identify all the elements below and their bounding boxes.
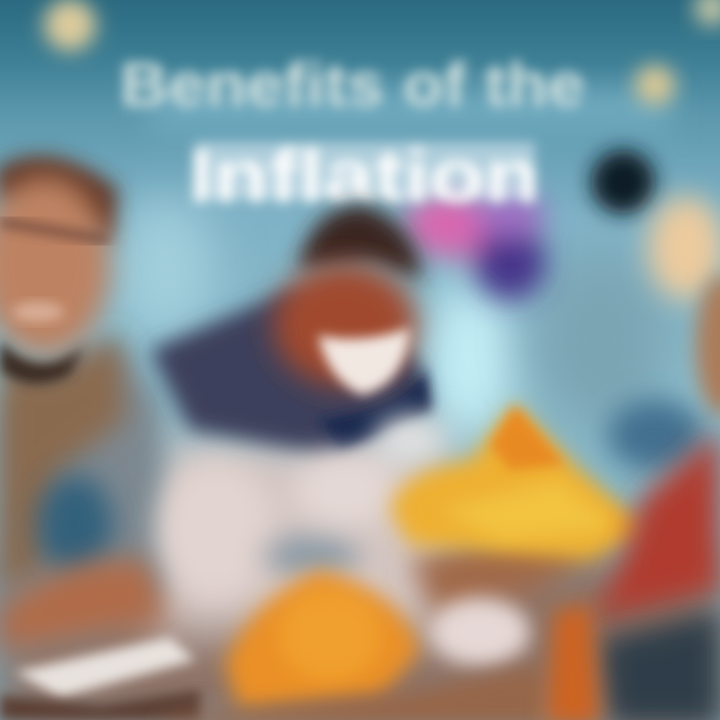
hair [298,205,422,280]
beard [0,340,85,384]
person: center figure [150,205,430,455]
title line 1: Benefits of the [120,51,585,120]
white bowl [430,598,530,666]
brown basket under yellow food [410,530,610,620]
glasses [0,222,108,240]
warm lower scene base [0,440,720,720]
background lights [44,0,720,105]
white table items [157,415,445,600]
dark chair [600,610,720,720]
orange food pile [225,570,420,710]
sweater [0,340,170,650]
yellow food pile [390,405,650,560]
pink and purple balloon [405,193,546,300]
collar [320,370,430,450]
face [696,275,720,415]
hair [0,156,118,240]
title line 2: Inflation [188,134,540,219]
white mask [318,328,410,395]
person: right child [545,275,720,720]
smile [12,302,64,322]
red sweater [590,430,720,620]
person: left man [0,156,200,720]
dark round object [591,150,655,214]
table edge [160,665,545,720]
forearm [0,559,165,650]
face [0,175,110,355]
white paper [15,637,195,698]
lower dark [0,690,200,720]
denim panel [37,475,113,575]
blue shoulder [607,399,703,471]
scarf [0,335,125,590]
peach lamp [648,196,720,300]
face [273,263,417,387]
navy sweater [150,290,430,455]
orange bottle [545,605,600,720]
